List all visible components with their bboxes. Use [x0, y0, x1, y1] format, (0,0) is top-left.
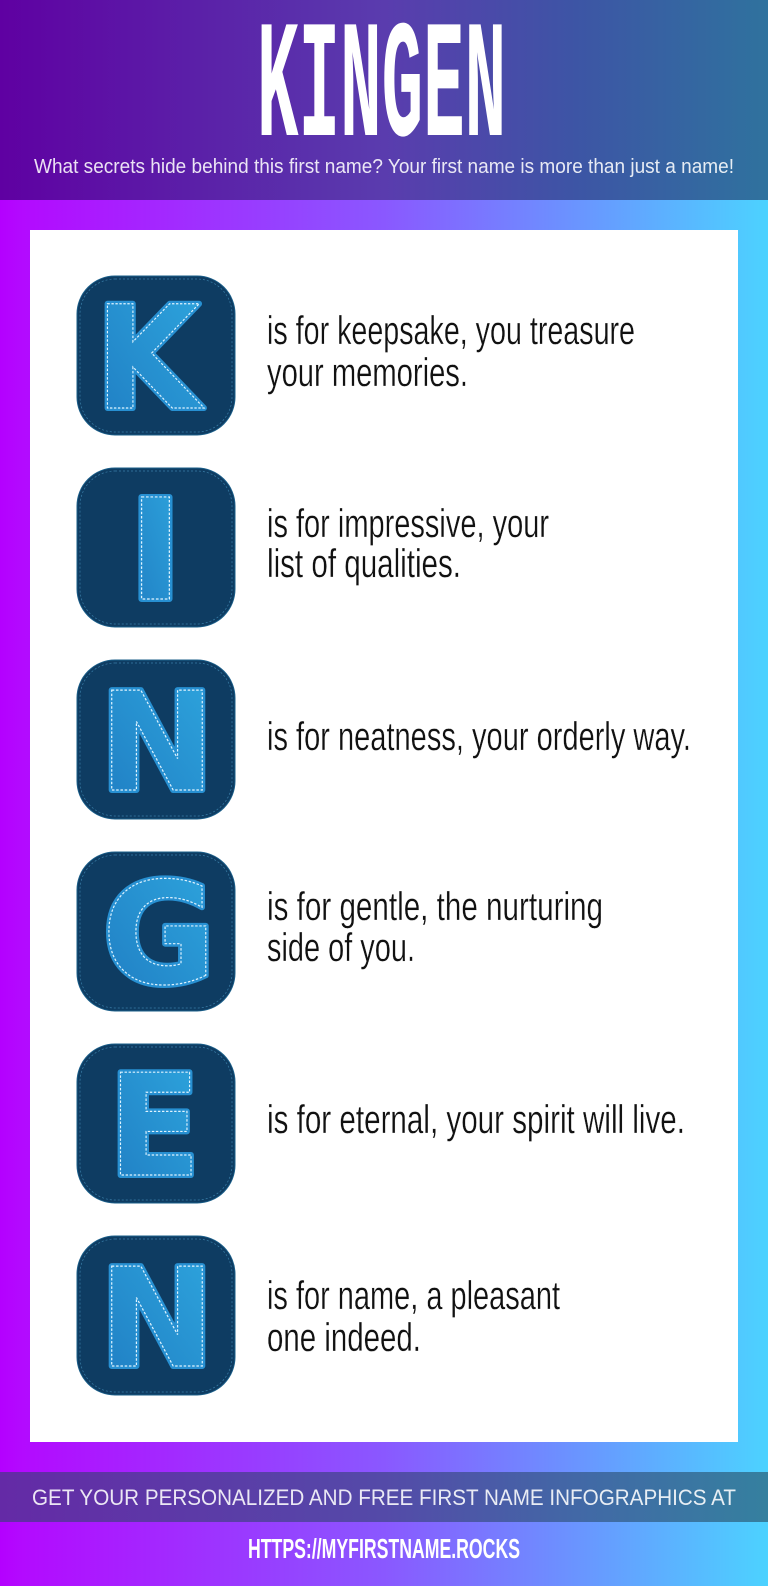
text I: is for impressive, your: [267, 502, 549, 546]
icon: letter I: I: [128, 470, 183, 633]
footer url: HTTPS://MYFIRSTNAME.ROCKS: [248, 1533, 520, 1564]
icon: letter N: N: [99, 1240, 215, 1399]
white content panel: [30, 230, 738, 1442]
subtitle: What secrets hide behind this first name? Your first name is more than just a name!: [34, 156, 734, 178]
icon: letter I: [77, 468, 235, 633]
text G: is for gentle, the nurturing: [267, 885, 603, 929]
text G: side of you.: [267, 926, 415, 970]
icon: letter K: K: [95, 275, 205, 442]
text N2: one indeed.: [267, 1316, 421, 1360]
text K: your memories.: [267, 351, 468, 395]
icon: letter I: I: [128, 470, 183, 633]
text K: [267, 309, 635, 395]
icon: letter E: [77, 1044, 235, 1209]
icon: letter E: E: [108, 1045, 201, 1209]
row N2: [77, 1236, 560, 1399]
icon: letter N: N: [99, 1240, 215, 1399]
text I: list of qualities.: [267, 542, 461, 586]
row G: [77, 852, 603, 1017]
header band: [0, 0, 768, 200]
icon: letter N: N: [99, 664, 215, 823]
row E: [77, 1044, 685, 1209]
footer band: [0, 1472, 768, 1522]
text I: [267, 502, 549, 586]
footer text: GET YOUR PERSONALIZED AND FREE FIRST NAME INFOGRAPHICS AT: [32, 1485, 736, 1510]
text N2: [267, 1274, 560, 1360]
row I: [77, 468, 549, 633]
icon: letter E: E: [108, 1045, 201, 1209]
text G: [267, 885, 603, 970]
icon: letter G: G: [102, 853, 216, 1017]
row N: [77, 660, 691, 823]
row K: [77, 275, 635, 442]
title: KINGEN: [257, 0, 506, 186]
icon: letter K: K: [95, 275, 205, 442]
icon: letter N: N: [99, 664, 215, 823]
text K: is for keepsake, you treasure: [267, 309, 635, 353]
text N2: is for name, a pleasant: [267, 1274, 560, 1318]
icon: letter G: G: [102, 853, 216, 1017]
